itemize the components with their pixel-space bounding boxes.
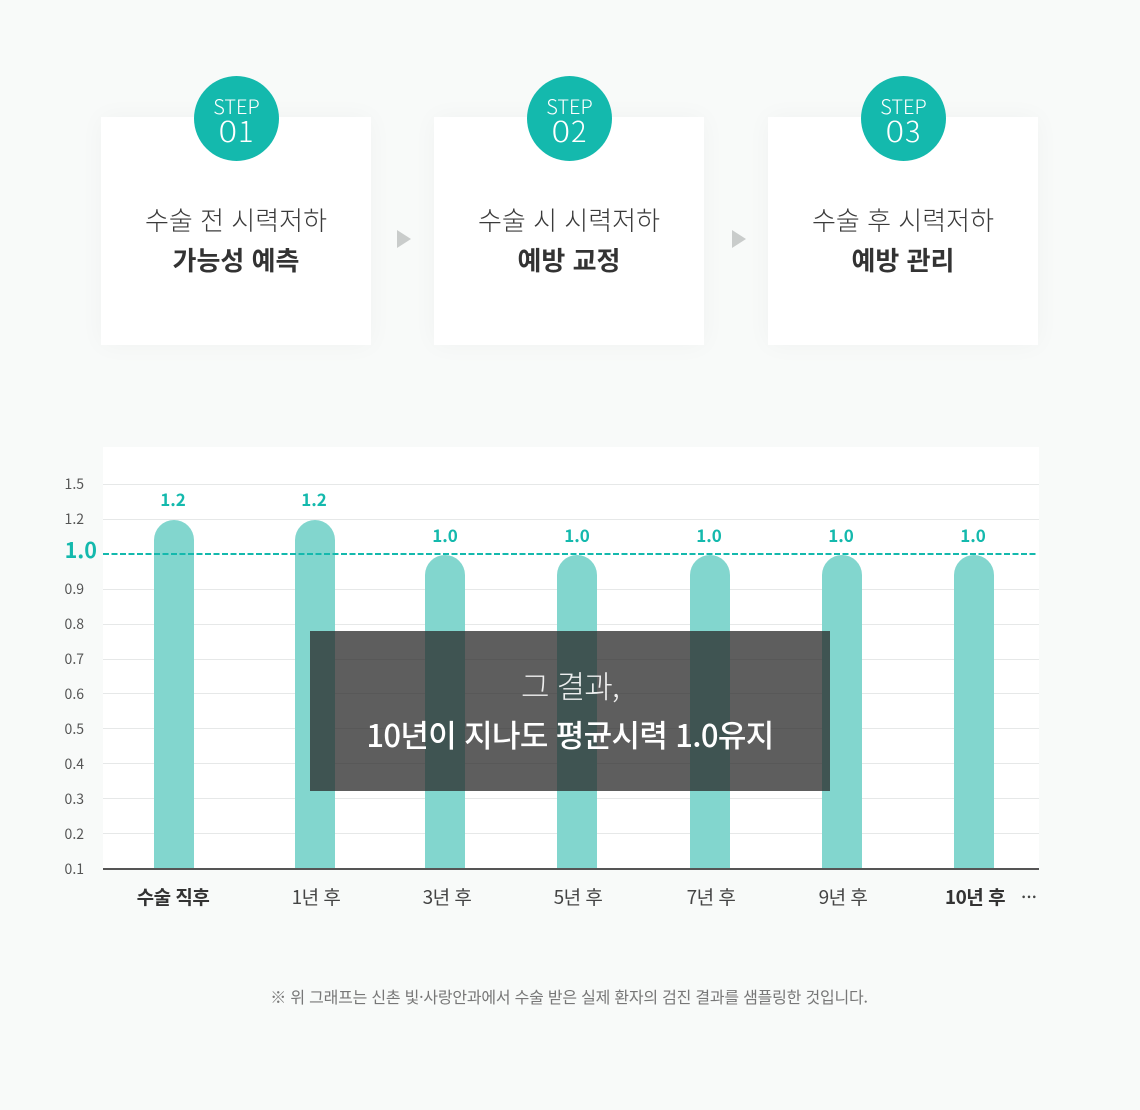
- value labels: 1.0: [696, 522, 722, 547]
- x axis labels: ···: [1021, 883, 1037, 910]
- x axis labels: 9년 후: [819, 883, 867, 910]
- y axis labels: [65, 474, 84, 878]
- y axis labels: 1.2: [65, 508, 84, 528]
- text: step 02 emphasis: 예방 교정: [518, 241, 620, 278]
- y axis labels: 0.1: [65, 858, 84, 878]
- callout first line: 그 결과,: [521, 662, 619, 707]
- panel: step 01 card: [101, 117, 371, 345]
- number: 02: 0: [552, 109, 569, 151]
- text: step 01 emphasis: 가능성 예측: [173, 241, 299, 278]
- callout: result overlay: [310, 631, 830, 791]
- number: 02: 2: [571, 109, 586, 151]
- number: 01: 1: [238, 109, 253, 151]
- arrow: step 2 to 3: [732, 230, 746, 248]
- number: 01: 0: [219, 109, 236, 151]
- y axis labels: 0.2: [65, 824, 84, 844]
- number: 03: [886, 109, 920, 151]
- reference label 1.0: 1.0: [65, 534, 97, 565]
- value labels: 1.0: [960, 522, 986, 547]
- value labels: 1.2: [301, 486, 327, 511]
- chart plot background: [103, 447, 1039, 869]
- footnote: ※ 위 그래프는 신촌 빛·사랑안과에서 수술 받은 실제 환자의 검진 결과를 샘플링한 것입니다.: [270, 984, 868, 1008]
- text: step 03 description: 수술 후 시력저하: [812, 201, 994, 238]
- callout second line: 10년이 지나도 평균시력 1.0유지: [366, 711, 774, 756]
- text: step 01 description: 수술 전 시력저하: [145, 201, 327, 238]
- label: step: STEP: [546, 91, 593, 120]
- value labels: 1.0: [432, 522, 458, 547]
- x axis labels: 10년 후: [945, 883, 1005, 910]
- x axis line: [103, 868, 1039, 870]
- y axis labels: 0.5: [65, 718, 84, 738]
- icon: step 03 badge: [861, 76, 946, 161]
- x axis labels: 3년 후: [423, 883, 471, 910]
- label: step: STEP: [213, 91, 260, 120]
- y axis labels: 0.4: [65, 754, 84, 774]
- arrow: step 1 to 2: [397, 230, 411, 248]
- text: step 03 emphasis: 예방 관리: [852, 241, 954, 278]
- baseline reference line 1.0: [103, 553, 1037, 555]
- icon: step 01 badge: [194, 76, 279, 161]
- value labels: 1.0: [828, 522, 854, 547]
- y axis labels: 0.6: [65, 684, 84, 704]
- text: step 02 description: 수술 시 시력저하: [478, 201, 660, 238]
- x axis labels: [137, 883, 1037, 910]
- bars: [154, 520, 994, 868]
- x axis labels: 7년 후: [687, 883, 735, 910]
- y axis labels: 1.5: [65, 474, 84, 494]
- value labels: 1.0: [564, 522, 590, 547]
- x axis labels: 수술 직후: [137, 883, 209, 910]
- panel: step 02 card: [434, 117, 704, 345]
- y axis labels: 0.8: [65, 614, 84, 634]
- value labels: [160, 486, 986, 547]
- label: step: STEP: [880, 91, 927, 120]
- value labels: 1.2: [160, 486, 186, 511]
- x axis labels: 1년 후: [292, 883, 340, 910]
- y axis labels: 0.9: [65, 578, 84, 598]
- number: 01: [219, 109, 253, 151]
- y axis labels: 0.3: [65, 788, 84, 808]
- number: 02: [552, 109, 586, 151]
- icon: step 02 badge: [527, 76, 612, 161]
- number: 03: 0: [886, 109, 903, 151]
- number: 03: 3: [905, 109, 920, 151]
- y axis labels: 0.7: [65, 648, 84, 668]
- panel: step 03 card: [768, 117, 1038, 345]
- x axis labels: 5년 후: [554, 883, 602, 910]
